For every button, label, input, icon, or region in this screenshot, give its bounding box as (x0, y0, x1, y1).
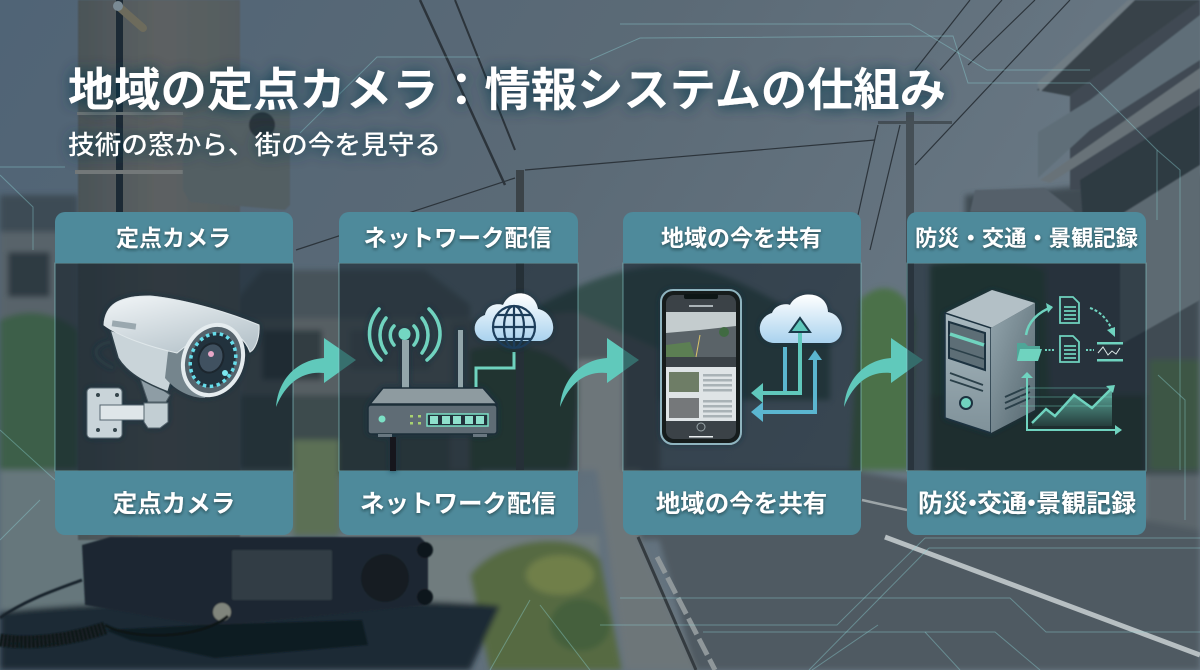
gap green foreground (293, 440, 339, 535)
heading: 防災・交通・景観記録 (915, 226, 1138, 251)
hood (104, 296, 259, 353)
icon: wifi router (368, 309, 497, 471)
icon: connector line (476, 352, 514, 387)
caption: 地域の今を共有 (656, 490, 827, 518)
mount (138, 372, 170, 402)
mountain (530, 266, 830, 400)
pole-mounted camera box (183, 110, 290, 210)
panel: 定点カメラ (55, 212, 293, 535)
panel: 防災・交通・景観記録 (907, 212, 1146, 535)
trees right of road (850, 288, 915, 470)
gap strip house (578, 360, 623, 470)
heading: ネットワーク配信 (364, 225, 552, 251)
caption: 定点カメラ (113, 490, 235, 518)
card header (55, 212, 293, 263)
bush (470, 541, 622, 670)
icon: smartphone (661, 290, 741, 444)
utility pole (75, 0, 240, 540)
panel: 地域の今を共有 (623, 212, 861, 535)
card footer (907, 471, 1146, 535)
card header (623, 212, 861, 263)
card footer (623, 471, 861, 535)
apartment building (970, 0, 1200, 345)
card body (339, 263, 578, 471)
heading: 地域の今を共有 (661, 225, 822, 251)
lens (170, 313, 256, 407)
card footer (339, 471, 578, 535)
panel: ネットワーク配信 (339, 212, 578, 535)
caption: ネットワーク配信 (360, 490, 556, 518)
body (110, 330, 180, 392)
card body (907, 263, 1146, 471)
card body (55, 263, 293, 471)
caption: 防災・交通・景観記録 (918, 490, 1136, 518)
arrow 3 (844, 338, 923, 407)
card footer (55, 471, 293, 535)
street poles and wires (516, 170, 524, 470)
table (0, 600, 500, 670)
radio device (0, 537, 433, 658)
heading: 定点カメラ (116, 225, 231, 251)
icon: files and chart (1017, 297, 1123, 435)
subtitle: 技術の窓から、街の今を見守る (68, 130, 441, 160)
arrow 2 (560, 338, 639, 407)
right house (965, 175, 1200, 475)
icon: security camera (87, 296, 259, 438)
card header (339, 212, 578, 263)
road surface (640, 470, 1200, 670)
icon: globe cloud (475, 293, 553, 348)
centre houses (238, 270, 470, 320)
card header (907, 212, 1146, 263)
sidewalk (597, 470, 697, 670)
card body (623, 263, 861, 471)
icon: server tower (945, 290, 1035, 433)
title: 地域の定点カメラ：情報システムの仕組み (68, 64, 946, 116)
road markings (638, 537, 696, 670)
icon: cloud with sync arrows (751, 295, 842, 422)
lower left ground (0, 470, 293, 610)
arrow 1 (276, 338, 356, 407)
left house (0, 195, 78, 232)
